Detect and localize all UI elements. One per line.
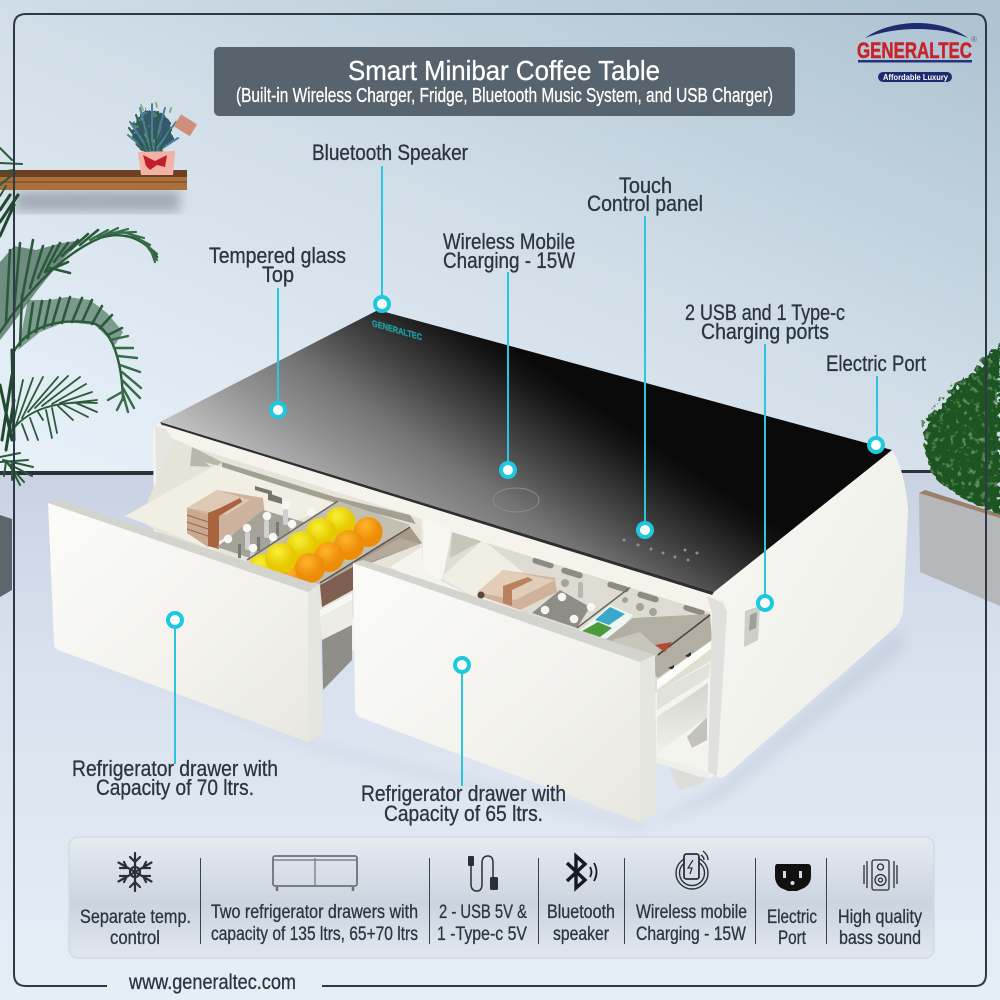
right drawer (353, 560, 657, 822)
callout marker: wireless charging (501, 463, 515, 477)
switch port (744, 606, 760, 647)
touch buttons (622, 538, 698, 562)
label: wireless mobile charging (443, 229, 575, 273)
title banner: Smart Minibar Coffee Table (348, 55, 660, 86)
wireless charger circle (493, 488, 539, 512)
feature text: wireless: Charging - 15W (636, 924, 746, 945)
label: usb ports: Charging ports (701, 319, 829, 344)
feature text: sound: bass sound (839, 928, 921, 949)
feature text: wireless (636, 902, 747, 945)
label: drawer 70 litres: Refrigerator drawer with (72, 756, 278, 781)
callout marker: glass top (271, 403, 285, 417)
icon: snowflake (118, 853, 152, 891)
label: drawer 65 litres (361, 781, 566, 826)
side panel (712, 450, 908, 778)
connector lines (175, 166, 877, 786)
feature text: usb: 1 -Type-c 5V (437, 924, 527, 945)
left opening (125, 436, 424, 640)
glass tray right (605, 614, 712, 678)
flower foliage (128, 103, 178, 155)
icon: usb cable (468, 856, 498, 891)
title banner (214, 47, 795, 116)
feature text: electric port: Port (778, 928, 807, 949)
floor shadow (60, 625, 905, 830)
feature text: electric port: Electric (767, 907, 817, 928)
glass top (160, 310, 892, 592)
feature text: electric port (767, 907, 817, 949)
glass logo: GENERALTEC (372, 318, 422, 342)
bush foliage (924, 342, 1000, 514)
frame right edge (707, 596, 727, 776)
icon: wireless charger (676, 851, 708, 889)
milk carton (577, 586, 633, 640)
feature text: temperature (80, 907, 191, 949)
leg (670, 765, 706, 790)
bottles right (532, 582, 595, 628)
price tag (174, 114, 197, 136)
callout marker: 65 litre drawer (455, 658, 469, 672)
fruits (248, 507, 382, 591)
feature text: usb: 2 - USB 5V & (439, 902, 527, 923)
label: drawer 70 litres: Capacity of 70 ltrs. (96, 775, 254, 800)
label: wireless mobile charging: Wireless Mobile (443, 229, 575, 254)
left post shading (155, 426, 175, 556)
lower right drawer (657, 640, 712, 770)
stacked boxes left (187, 490, 265, 549)
feature text: drawers (211, 902, 418, 945)
feature text: drawers: Two refrigerator drawers with (211, 902, 418, 923)
label: touch control panel: Control panel (587, 191, 703, 216)
label: touch control panel (587, 173, 703, 216)
icon: bluetooth (567, 856, 596, 888)
feature text: bluetooth: speaker (553, 924, 610, 945)
callout marker: touch panel (638, 523, 652, 537)
feature text: drawers: capacity of 135 ltrs, 65+70 ltrs (211, 924, 418, 945)
right opening (440, 532, 712, 692)
label: tempered glass top: Tempered glass (209, 243, 346, 268)
center pillar (422, 518, 452, 582)
palm plant (0, 148, 157, 485)
left pot sliver (0, 515, 12, 597)
right bush and planter (919, 342, 1000, 606)
label: electric port: Electric Port (826, 351, 926, 376)
feature text: usb (437, 902, 527, 945)
background wall (0, 0, 1000, 474)
logo: Affordable Luxury (883, 72, 948, 82)
label: drawer 65 litres: Refrigerator drawer with (361, 781, 566, 806)
icon: electric socket (775, 864, 811, 891)
feature text: sound: High quality (838, 907, 922, 928)
logo (857, 23, 977, 82)
label: drawer 65 litres: Capacity of 65 ltrs. (384, 801, 543, 826)
feature text: temperature: control (110, 928, 160, 949)
callout marker: bluetooth speaker (375, 297, 389, 311)
label: wireless mobile charging: Charging - 15W (443, 248, 575, 273)
icon: speaker (864, 860, 897, 890)
front body (153, 422, 727, 778)
label: touch control panel: Touch (619, 173, 672, 198)
label: tempered glass top (209, 243, 346, 287)
feature text: bluetooth (547, 902, 615, 945)
front strip over openings (163, 425, 723, 613)
skirting line (0, 470, 1000, 475)
fruit tray (247, 501, 422, 690)
title banner: (Built-in Wireless Charger, Fridge, Bluetooth Music System, and USB Charger) (236, 85, 773, 107)
icon: table with two drawers (273, 856, 357, 891)
feature panel (69, 837, 934, 958)
feature text: temperature: Separate temp. (80, 907, 191, 928)
label: usb ports: 2 USB and 1 Type-c (685, 300, 845, 325)
stacked boxes right (477, 570, 557, 610)
feature text: wireless: Wireless mobile (636, 902, 747, 923)
label: tempered glass top: Top (262, 262, 294, 287)
background floor (0, 472, 1000, 1000)
bottles left (217, 501, 315, 560)
callout marker: 70 litre drawer (168, 613, 182, 627)
callout marker: USB ports (758, 596, 772, 610)
coffee table (48, 310, 908, 830)
left drawer (48, 500, 323, 742)
label: drawer 70 litres (72, 756, 278, 800)
label: usb ports (685, 300, 845, 344)
callout marker: electric port (869, 438, 883, 452)
feature text: sound (838, 907, 922, 949)
shelf with flower pot (0, 103, 197, 212)
website: www.generaltec.com (128, 971, 296, 994)
feature text: bluetooth: Bluetooth (547, 902, 615, 923)
label: bluetooth speaker: Bluetooth Speaker (312, 140, 468, 165)
logo: ® (971, 35, 977, 44)
